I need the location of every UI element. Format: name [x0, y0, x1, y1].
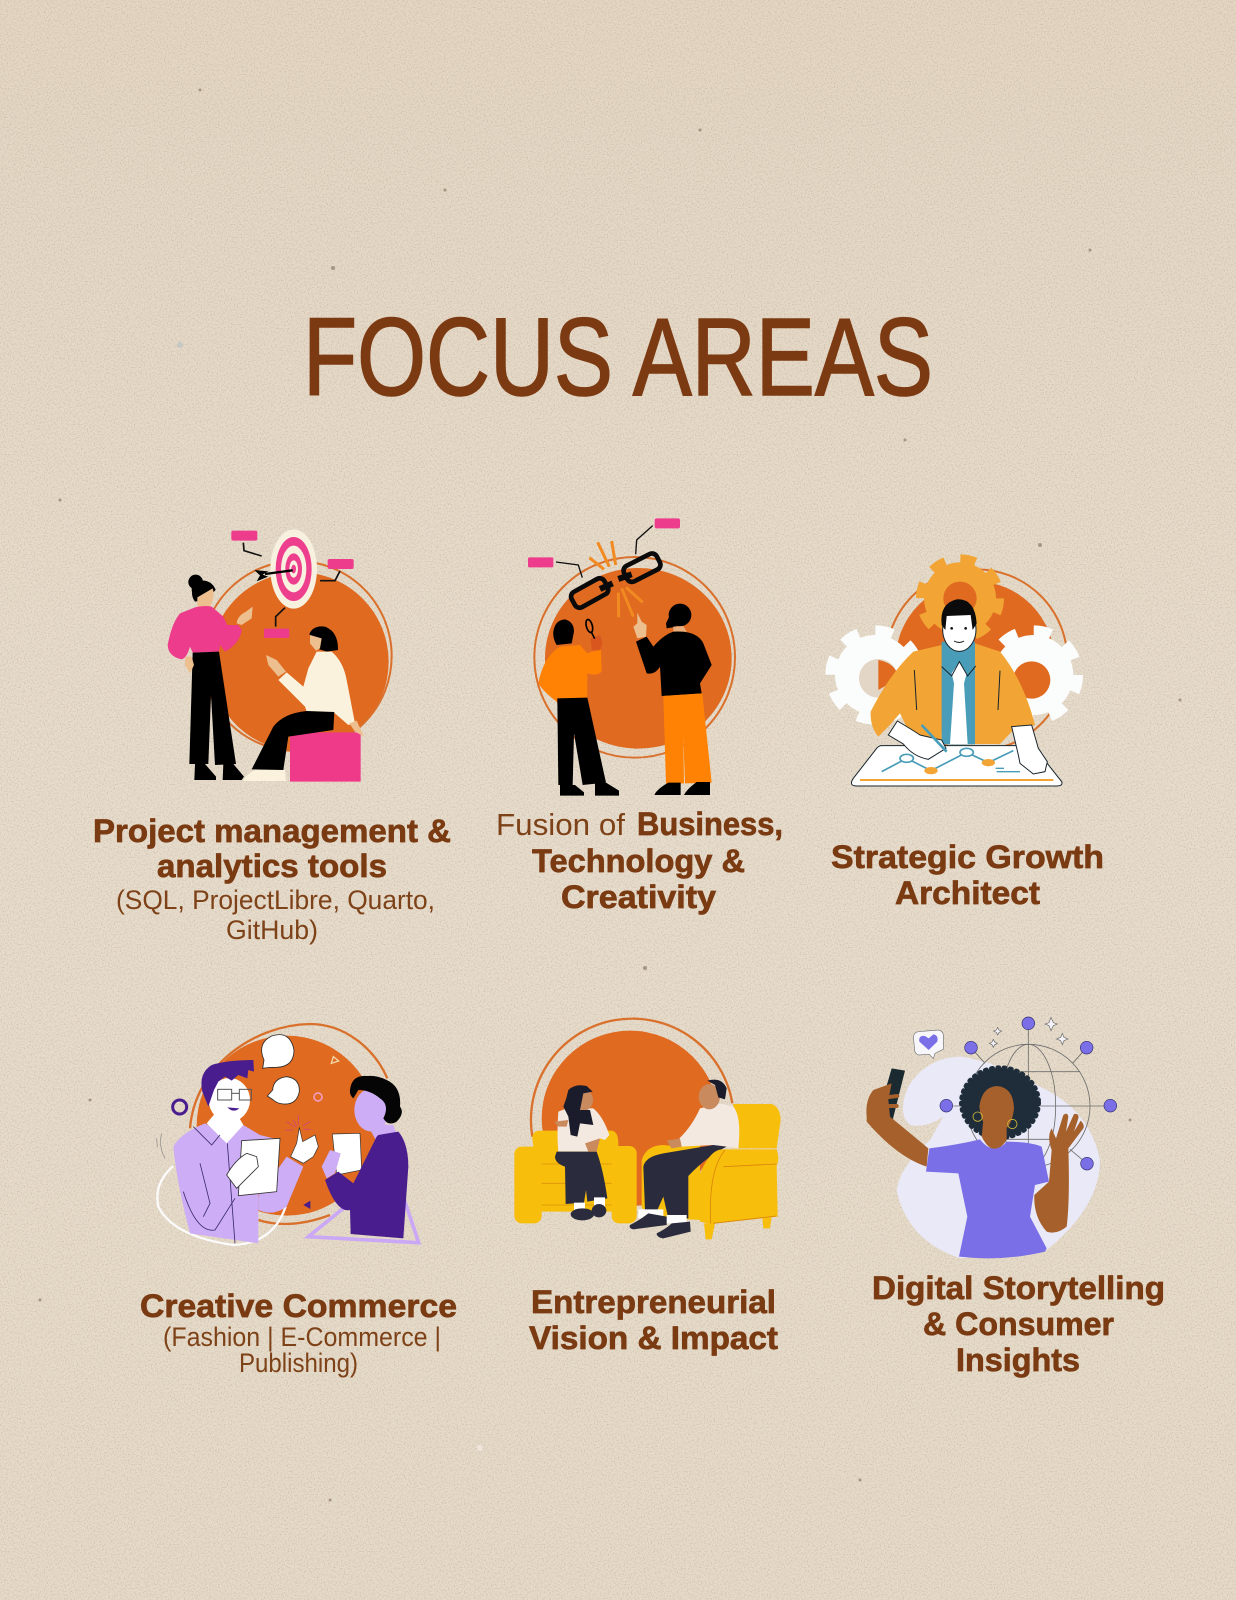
left armchair [514, 1131, 637, 1223]
woman [322, 1076, 408, 1238]
label: Architect [895, 875, 1040, 911]
label: Publishing) [239, 1348, 358, 1378]
sparkles [989, 1017, 1068, 1047]
man [871, 599, 1035, 744]
woman [866, 1068, 1084, 1258]
label: Fusion of [496, 807, 625, 842]
label: Business, [637, 806, 783, 842]
icon: broken chain [569, 552, 662, 610]
panel: strategic growth [831, 561, 1104, 911]
panel: creative commerce [140, 1024, 457, 1378]
label: & Consumer [923, 1306, 1114, 1342]
panel: fusion [496, 518, 783, 915]
label: Entrepreneurial [531, 1284, 776, 1320]
title: FOCUS AREAS [303, 296, 933, 419]
woman seated [554, 1085, 609, 1220]
illustration: two people with notebooks [157, 1024, 419, 1245]
label: Vision & Impact [529, 1320, 778, 1356]
illustration: two people in armchairs [514, 1019, 781, 1239]
illustration: two people and broken chain [528, 518, 735, 796]
person in orange top [538, 619, 619, 796]
label [140, 1288, 457, 1378]
label: (SQL, ProjectLibre, Quarto, [116, 885, 435, 915]
label: analytics tools [157, 848, 387, 884]
label: Strategic Growth [831, 839, 1104, 875]
label [496, 806, 783, 915]
speech bubbles [262, 1035, 299, 1104]
callout tags [231, 531, 354, 638]
callout tags [528, 518, 680, 567]
icon: target [270, 529, 317, 609]
illustration: two women and target [168, 529, 392, 782]
icon: right gear [991, 633, 1075, 717]
label [872, 1270, 1165, 1378]
woman standing [168, 575, 253, 780]
icon: globe with nodes [940, 1017, 1117, 1170]
man [157, 1060, 318, 1243]
label: GitHub) [226, 915, 318, 945]
hair [961, 1068, 1039, 1138]
label: Insights [956, 1342, 1080, 1378]
icon: top gear [923, 561, 997, 636]
illustration: woman taking selfie with globe [866, 1017, 1117, 1258]
panel: digital storytelling [866, 1017, 1165, 1378]
label: Creativity [561, 879, 716, 915]
woman seated [243, 626, 364, 782]
label: (Fashion | E-Commerce | [163, 1322, 441, 1352]
label [831, 839, 1104, 911]
panel: entrepreneurial [514, 1019, 781, 1356]
label: Digital Storytelling [872, 1270, 1165, 1306]
illustration: man at board with gears [833, 561, 1075, 786]
label [93, 813, 451, 945]
hands and pen [888, 721, 1047, 774]
person in black top [633, 604, 712, 795]
icon: left gear [833, 633, 917, 717]
right armchair [642, 1104, 781, 1239]
panel: project management [93, 529, 451, 945]
label: Project management & [93, 813, 451, 849]
heart bubble [913, 1030, 943, 1059]
icon: arrow [254, 570, 293, 581]
small shapes [173, 1057, 339, 1209]
man seated [630, 1080, 778, 1238]
board with chart [851, 746, 1062, 786]
label [529, 1284, 778, 1356]
label: Technology & [532, 843, 745, 879]
label: Creative Commerce [140, 1288, 457, 1324]
